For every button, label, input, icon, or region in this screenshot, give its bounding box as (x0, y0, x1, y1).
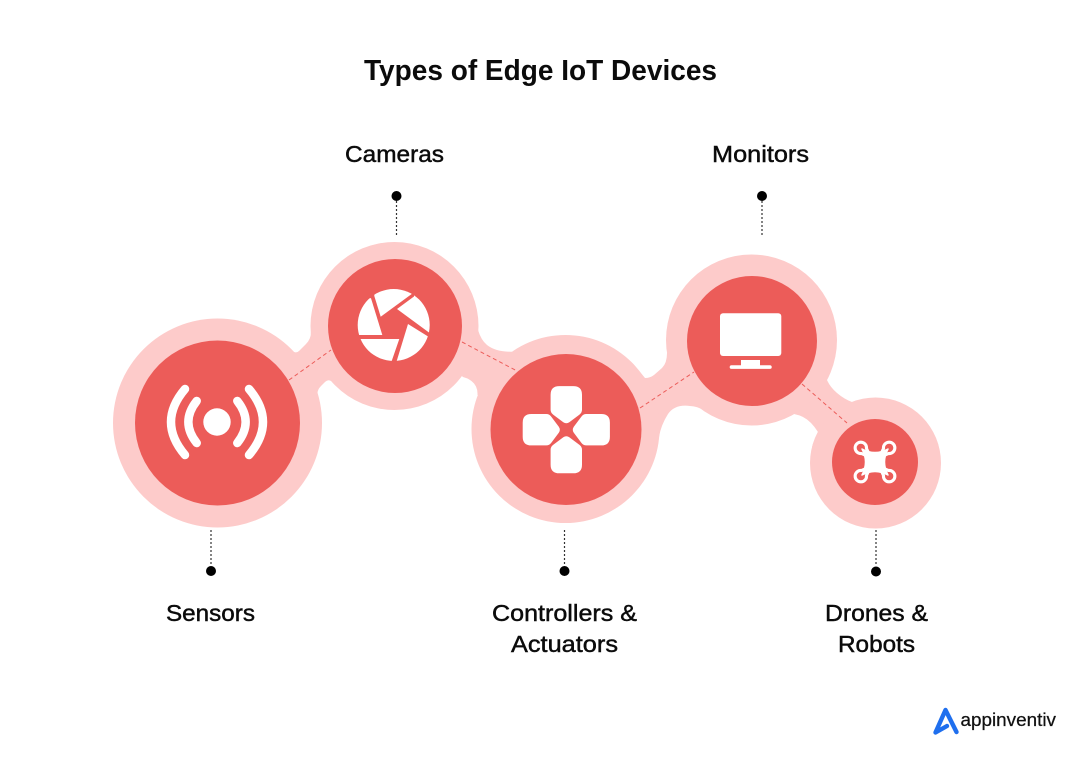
logo: appinventiv (936, 710, 1056, 732)
chain of connected device circles (113, 242, 941, 528)
leader: controllers and actuators (560, 530, 570, 576)
icon: sensor signal (171, 389, 263, 455)
icon: directional pad (523, 386, 610, 473)
device: monitors (666, 254, 837, 426)
label: cameras: Cameras (345, 141, 444, 167)
label: drones and robots: Robots (838, 631, 915, 657)
device: drones and robots (810, 398, 941, 528)
logo wordmark: appinventiv (960, 710, 1056, 730)
label: drones and robots (825, 600, 928, 657)
dashed links between circles (289, 342, 847, 423)
leader: drones and robots (871, 530, 881, 576)
title: Types of Edge IoT Devices (364, 55, 717, 87)
label: sensors: Sensors (166, 600, 255, 626)
device: sensors (113, 318, 322, 528)
device: controllers and actuators (472, 335, 660, 523)
icon: drone (855, 442, 895, 482)
label: drones and robots: Drones & (825, 600, 928, 626)
icon: monitor (720, 313, 781, 369)
icon: camera aperture (358, 289, 430, 361)
label: controllers and actuators: Controllers & (492, 600, 637, 626)
label: controllers and actuators: Actuators (511, 631, 618, 657)
icon: logo mark (936, 710, 956, 732)
leader: sensors (206, 530, 216, 576)
leader: monitors (757, 191, 767, 237)
device: cameras (310, 242, 478, 410)
connector blobs (288, 330, 860, 450)
label: controllers and actuators (492, 600, 637, 657)
label: monitors: Monitors (712, 141, 809, 167)
leader: cameras (392, 191, 402, 237)
